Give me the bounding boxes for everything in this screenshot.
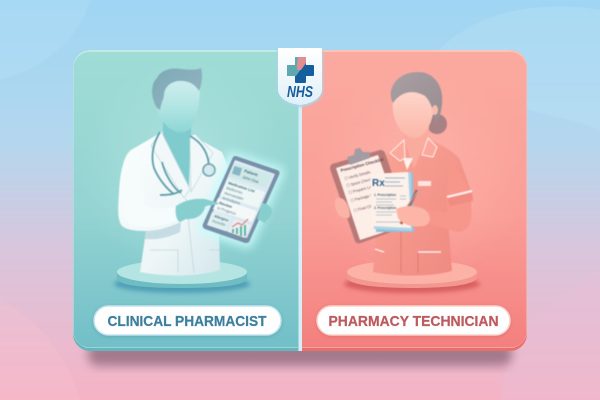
allergies card [207,212,231,231]
NHS badge [277,48,323,107]
left sleeve [122,165,180,227]
hair [152,68,202,110]
label: pharmacy technician [317,306,510,336]
centre divider [298,100,302,351]
coat seam and pockets [150,198,220,273]
ear [432,105,438,115]
holding fingers [257,203,272,223]
tablet: Atorvastatin [224,191,244,201]
coat [118,132,232,276]
hair [391,72,442,124]
tablet: Medication List [228,181,256,194]
tablet: Metformin [226,186,243,195]
figure: pharmacy technician [330,72,473,276]
review card [213,198,257,222]
tablet: Amlodipine [222,196,241,206]
coat lapels [151,131,213,198]
uniform [373,138,472,276]
clipboard: ☐ Verify Details [344,170,371,181]
panel: comparison card [73,50,527,351]
tablet: Patient: [244,168,259,177]
chart card [228,219,251,238]
clipboard: ☐ Final Check [353,203,378,213]
card drop shadow [88,342,512,366]
platform: pharmacist [114,260,250,293]
pen and hand [396,190,430,227]
head [393,86,434,138]
prescription stack: 2. Prescription [374,206,396,210]
patient card [229,163,272,188]
figure: clinical pharmacist [118,68,281,276]
tablet: Review [219,201,232,209]
clipboard: ☐ Prepare Label [348,184,377,195]
platform: technician [344,260,480,293]
clipboard [330,148,410,243]
clipboard: ☐ Package Medication [350,189,389,203]
label: clinical pharmacist [94,306,281,336]
teal shirt and neck [163,112,191,196]
coat shade under arm [145,222,181,239]
prescription stack: 1. Prescription [374,193,396,197]
icon: medical cross [287,57,314,83]
prescription stack: Rx [372,178,385,189]
left hand [335,198,350,218]
medication list [220,180,265,208]
NHS wordmark: NHS [287,84,314,101]
panel: pharmacy technician [286,50,527,351]
collar [390,138,437,161]
tablet: In Progress [217,206,236,216]
clip [347,148,370,165]
neck [404,120,429,168]
tablet glow [201,155,281,245]
prescription stack [370,172,414,232]
pockets and seam [401,225,418,273]
tablet: John Doe [242,174,260,184]
label: clinical pharmacist: CLINICAL PHARMACIST [108,313,266,330]
tablet: Penicillin [212,219,226,227]
bun [427,114,447,134]
tablet: Allergies [214,214,229,223]
right arm [424,162,471,232]
sleeve cuff [447,191,473,206]
stethoscope [152,132,209,195]
label: pharmacy technician: PHARMACY TECHNICIAN [328,313,498,330]
clipboard: ☐ Stock Check [346,177,372,188]
head [155,74,200,132]
checklist text: Prescription Checklist [340,157,385,173]
tablet [203,156,280,243]
badge [418,181,431,186]
pointing hand [176,199,219,222]
panel: clinical pharmacist [73,50,314,351]
